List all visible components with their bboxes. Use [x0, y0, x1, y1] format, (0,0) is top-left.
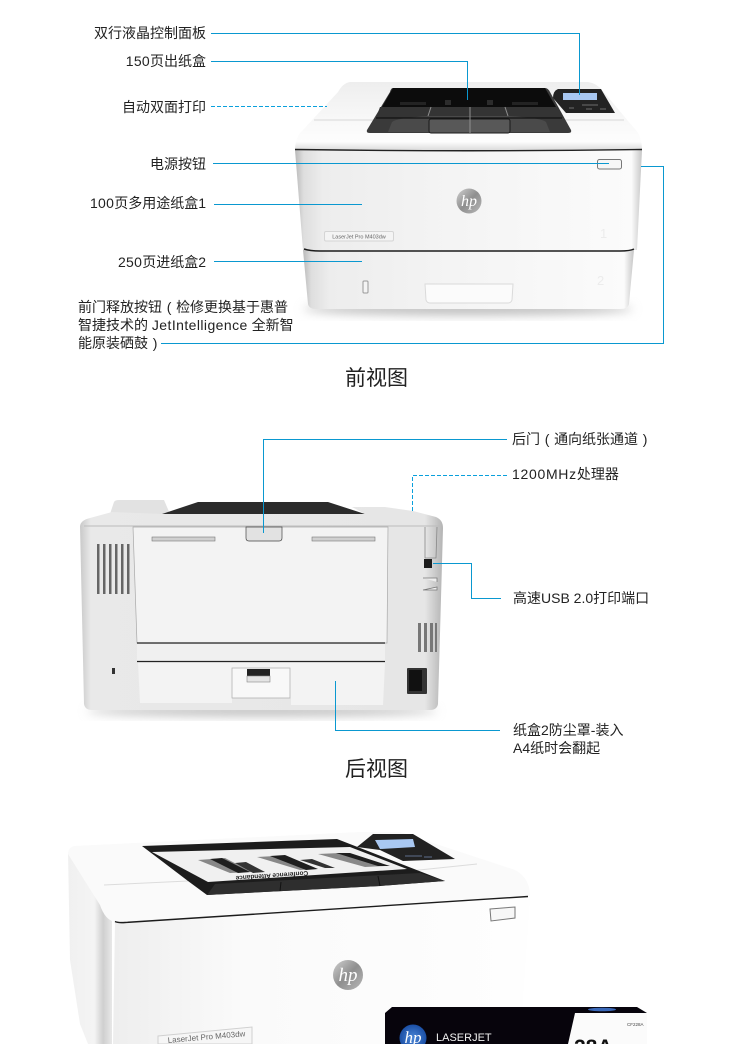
- power socket: [407, 668, 427, 694]
- toner box: [385, 1007, 647, 1044]
- angled output tray: [142, 839, 445, 895]
- hp logo front: hp: [461, 193, 477, 210]
- printed page: Conference Attendance: [235, 869, 308, 881]
- labels front: [78, 25, 294, 351]
- ethernet port: [423, 578, 437, 590]
- card slot: [425, 527, 437, 558]
- labels front: 150页出纸盒: [126, 53, 206, 69]
- angled printer top surface: [68, 832, 530, 922]
- printed page: [152, 847, 407, 882]
- angled panel buttons: [405, 856, 432, 857]
- tray handle: [425, 284, 513, 303]
- right vents: [418, 623, 437, 652]
- toner box body: [385, 1007, 647, 1044]
- hp logo front: [456, 188, 482, 214]
- dust cover: [232, 668, 290, 698]
- rear printer shadow: [87, 706, 437, 716]
- labels front: 100页多用途纸盒1: [90, 195, 206, 211]
- labels rear: 后门 ( 通向纸张通道 ): [512, 431, 647, 447]
- left vents: [97, 544, 130, 594]
- hp logo angled: [333, 960, 363, 990]
- rear door: [133, 527, 388, 643]
- toner part code: CF228A: [627, 1022, 644, 1027]
- labels rear: 高速USB 2.0打印端口: [513, 590, 649, 606]
- toner white panel: [568, 1013, 647, 1044]
- angled printer: [68, 832, 530, 1044]
- front printer top surface: [295, 82, 642, 150]
- rear printer body: [80, 507, 443, 710]
- heading: rear view: 后视图: [345, 758, 408, 781]
- front printer shadow: [303, 303, 633, 315]
- angled control panel: [357, 834, 455, 861]
- rear band: [137, 644, 385, 662]
- front printer main body: [295, 150, 642, 250]
- labels front: 双行液晶控制面板: [94, 25, 206, 41]
- angled printer side face: [68, 852, 112, 1044]
- door slots: [152, 537, 215, 541]
- output tray: [367, 88, 571, 133]
- labels rear: 1200MHz处理器: [512, 466, 619, 482]
- hp logo angled: hp: [338, 965, 358, 986]
- model label: [324, 232, 394, 241]
- angled power button: [490, 907, 515, 921]
- labels front: 电源按钮: [150, 156, 206, 172]
- door tab: [246, 527, 282, 541]
- usb port: [424, 559, 432, 568]
- callout lines front: [161, 34, 664, 344]
- power button: [598, 160, 622, 169]
- toner top logo: [588, 1008, 616, 1011]
- LCD screen: [563, 93, 597, 100]
- angled printer front: [113, 896, 530, 1044]
- labels front: 250页进纸盒2: [118, 254, 206, 270]
- paper tray 2: [303, 250, 634, 309]
- angled LCD screen: [375, 839, 415, 849]
- control panel: [553, 89, 615, 113]
- labels front: 前门释放按钮 ( 检修更换基于惠普: [78, 299, 288, 315]
- labels rear: A4纸时会翻起: [513, 740, 600, 756]
- labels rear: 纸盒2防尘罩-装入: [513, 722, 623, 738]
- toner blue hp logo: [400, 1024, 426, 1044]
- toner series name: LASERJET: [436, 1032, 492, 1044]
- labels rear: [512, 431, 649, 756]
- security lock slot: [112, 668, 115, 674]
- panel buttons: [569, 105, 606, 109]
- labels front: 自动双面打印: [122, 99, 206, 115]
- lower panels: [138, 662, 385, 705]
- labels front: 能原装硒鼓 ): [78, 335, 157, 351]
- tray numbers: 1: [600, 226, 607, 241]
- rear dark tray: [162, 502, 365, 514]
- labels front: 智捷技术的 JetIntelligence 全新智: [78, 317, 294, 333]
- front view printer: [295, 82, 642, 315]
- rear view printer: [80, 500, 443, 716]
- callout lines rear: [264, 440, 507, 730]
- rear left bump: [110, 500, 170, 514]
- model label: LaserJet Pro M403dw: [332, 234, 386, 240]
- front view printer: 2: [597, 273, 604, 288]
- paper level icon: [363, 281, 368, 293]
- heading: front view: 前视图: [345, 367, 408, 390]
